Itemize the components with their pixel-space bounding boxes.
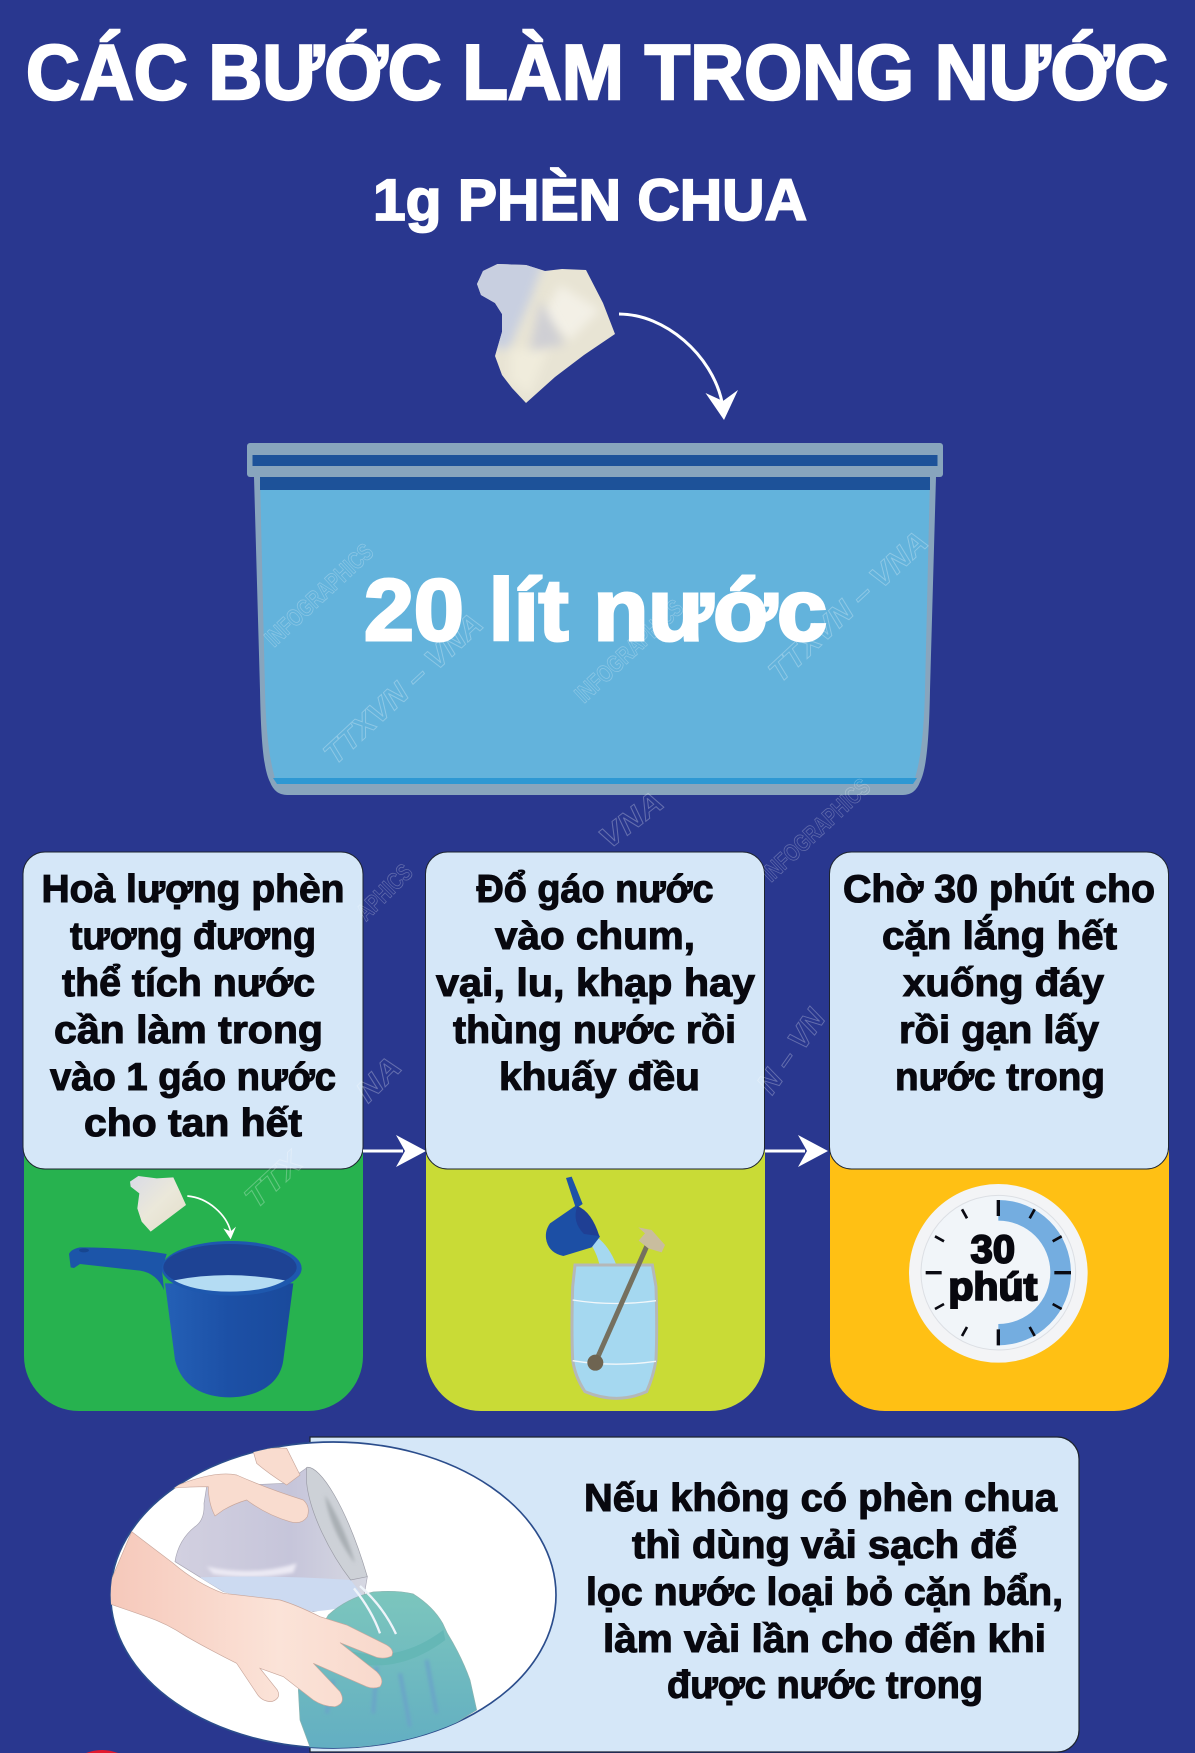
illustration: filtering water through cloth <box>108 1442 556 1752</box>
watermarks: NA <box>350 1050 408 1109</box>
card 2 text: vào chum, <box>495 915 695 958</box>
title: CÁC BƯỚC LÀM TRONG NƯỚC <box>26 28 1168 116</box>
card 1 text: tương đương <box>70 915 316 958</box>
card 2 text: vại, lu, khạp hay <box>436 962 755 1005</box>
red mark at bottom edge <box>86 1750 118 1753</box>
icon: alum rock <box>477 264 615 403</box>
icon: alum dropped into water scoop <box>69 1176 302 1397</box>
card 1 text <box>42 868 344 1145</box>
card 2: pour and stir <box>426 852 765 1411</box>
card 2 text <box>436 868 755 1099</box>
card 1 text: thể tích nước <box>62 962 315 1005</box>
watermarks: N – VN <box>751 1002 833 1100</box>
note text: được nước trong <box>667 1664 983 1707</box>
card 3: wait 30 minutes <box>830 852 1169 1411</box>
arrow: rock into tub <box>619 314 738 420</box>
card 3 text: rồi gạn lấy <box>899 1009 1099 1052</box>
card 3 text: Chờ 30 phút cho <box>843 868 1155 911</box>
note text: làm vài lần cho đến khi <box>603 1618 1046 1661</box>
card 3 text: xuống đáy <box>903 962 1104 1005</box>
card 1 text: cho tan hết <box>84 1102 302 1145</box>
panel: cloth filter note <box>108 1437 1079 1752</box>
note text: lọc nước loại bỏ cặn bẩn, <box>586 1571 1063 1614</box>
card 2 text: khuấy đều <box>499 1056 700 1099</box>
tub of water <box>247 443 943 795</box>
watermarks: INFOGRAPHICS <box>757 774 876 887</box>
icon: 30 minute timer <box>909 1184 1088 1363</box>
card 1 text: cần làm trong <box>54 1009 323 1052</box>
watermarks: TTXVN – VNA <box>762 525 935 689</box>
watermarks: VNA <box>593 785 670 856</box>
card 1 text: vào 1 gáo nước <box>50 1056 336 1099</box>
note text: thì dùng vải sạch để <box>632 1524 1017 1567</box>
card 3 text: nước trong <box>895 1056 1105 1099</box>
card 3 text <box>843 868 1155 1099</box>
watermarks: TTX <box>238 1144 311 1215</box>
card 2 text: Đổ gáo nước <box>476 868 714 911</box>
watermarks: APHICS <box>351 859 418 926</box>
arrow: step 2 to step 3 <box>765 1135 828 1167</box>
subtitle: 1g alum: 1g PHÈN CHUA <box>373 168 807 233</box>
note text <box>584 1477 1063 1707</box>
card 2 text: thùng nước rồi <box>453 1009 736 1052</box>
watermarks <box>238 525 935 1215</box>
icon: pouring water into a jar with stirring stick <box>546 1177 665 1398</box>
arrow: step 1 to step 2 <box>363 1135 426 1167</box>
watermarks: TTXVN – VNA <box>317 607 490 771</box>
watermarks: INFOGRAPHICS <box>260 539 379 652</box>
timer label <box>948 1228 1037 1309</box>
watermarks: INFOGRAPHICS <box>570 595 689 708</box>
timer label: phút <box>948 1265 1037 1309</box>
card 3 text: cặn lắng hết <box>882 914 1117 958</box>
tub label: 20 lít nước <box>364 562 827 659</box>
timer label: 30 <box>971 1228 1015 1272</box>
card 1 text: Hoà lượng phèn <box>42 868 344 911</box>
card 1: dissolve alum <box>23 852 363 1411</box>
note text: Nếu không có phèn chua <box>584 1477 1057 1520</box>
